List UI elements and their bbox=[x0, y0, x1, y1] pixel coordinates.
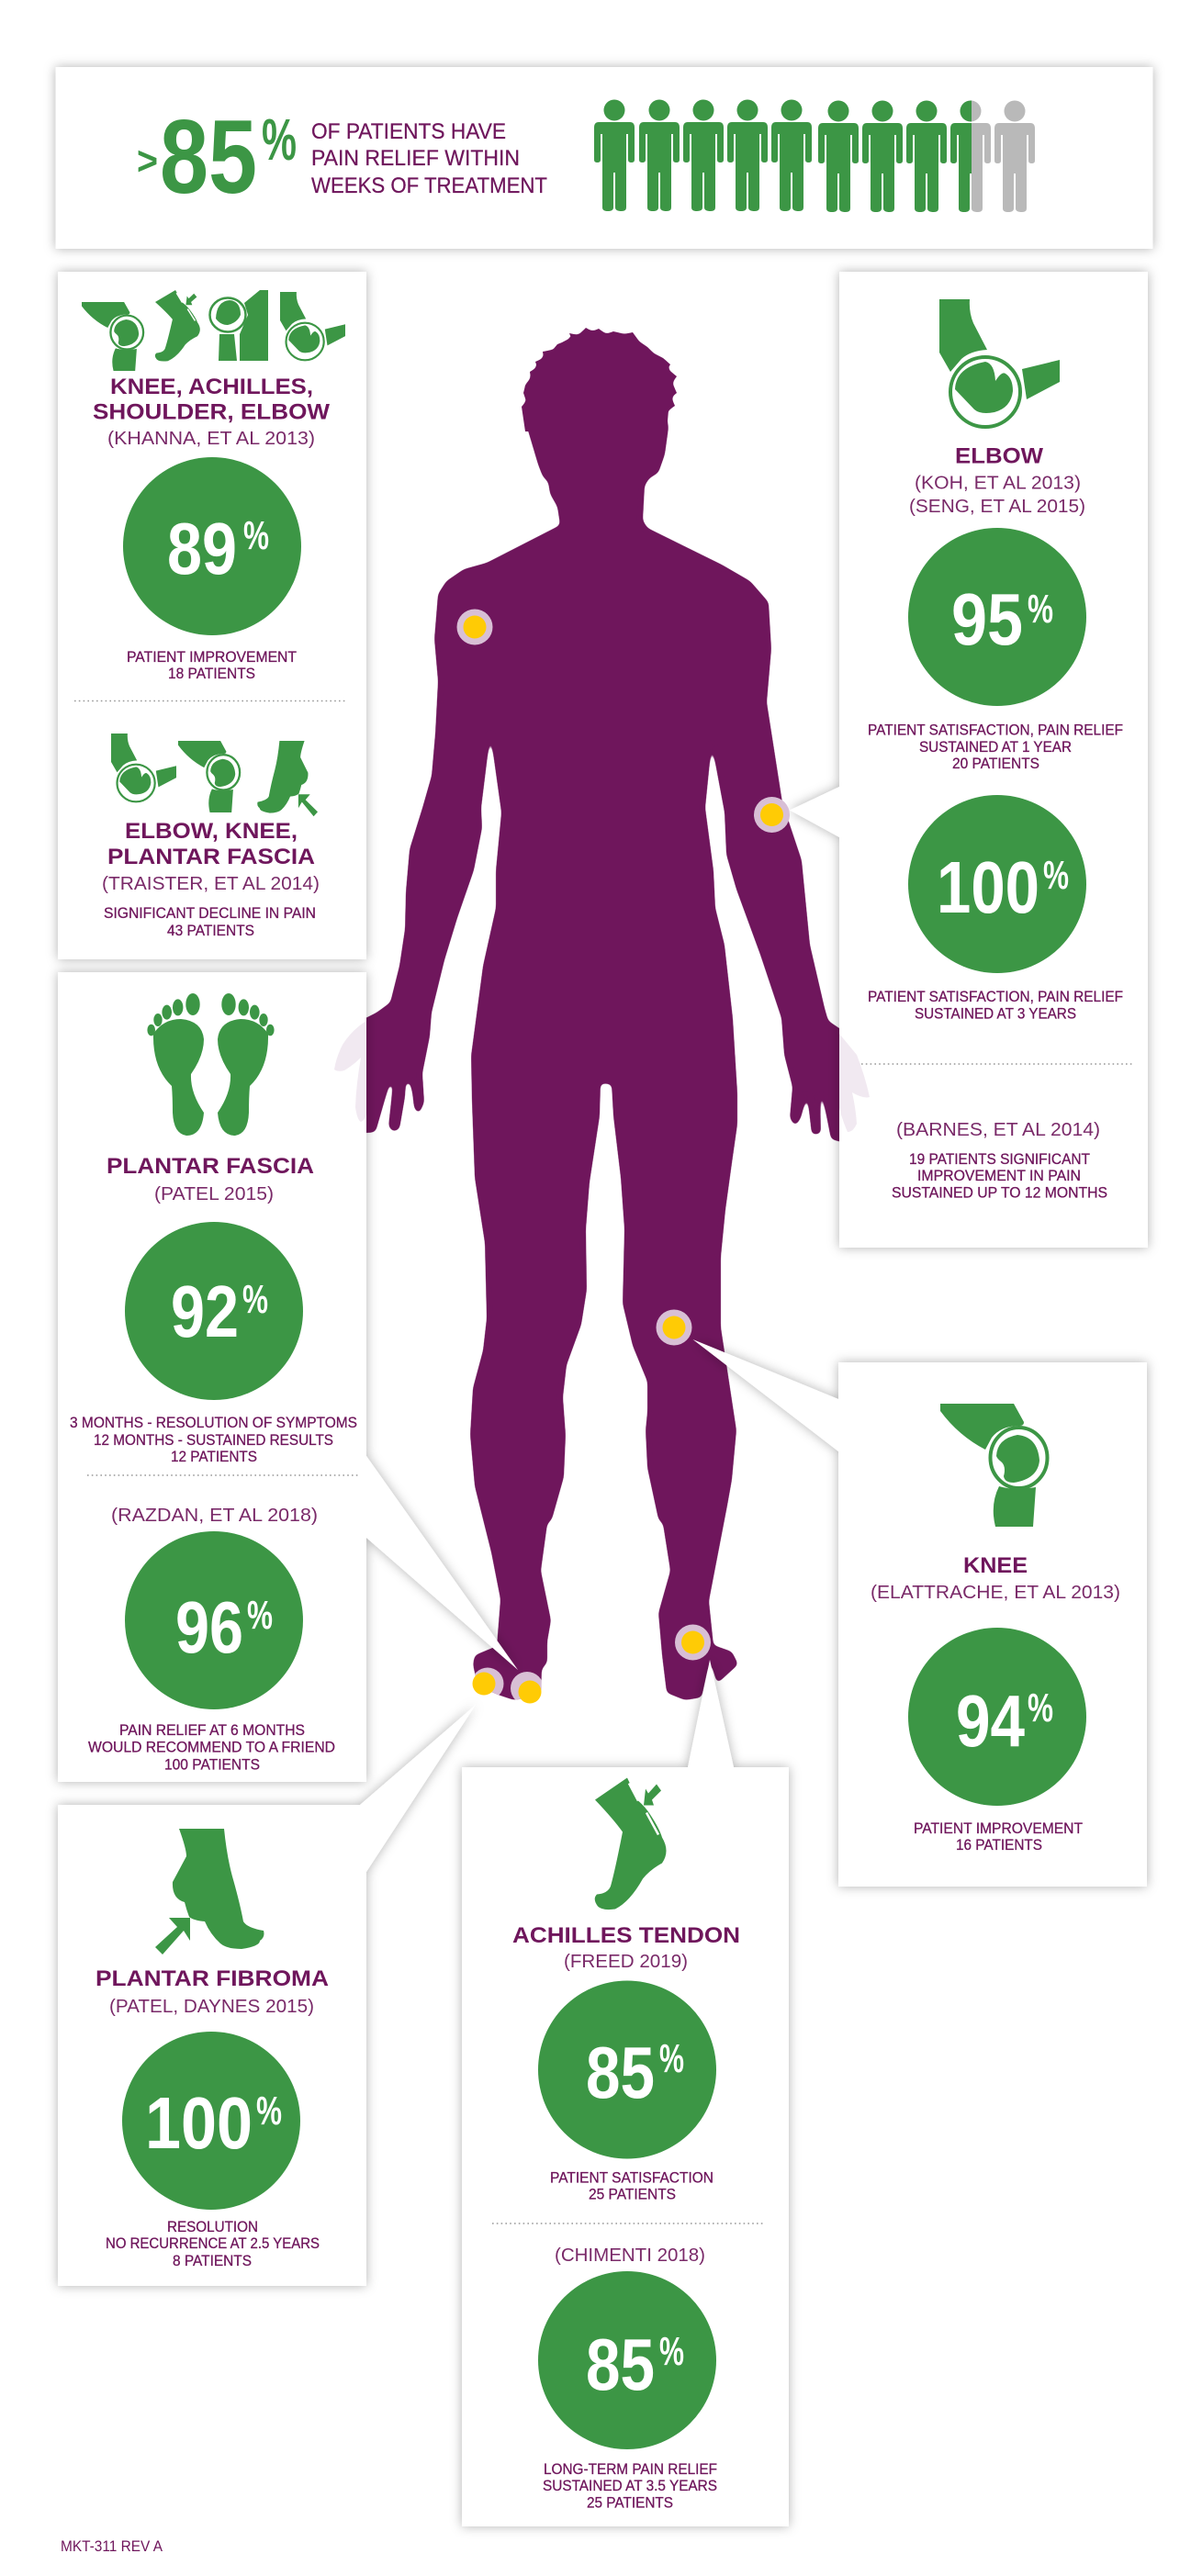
icon: achilles foot bbox=[595, 1777, 667, 1910]
stat circle 100 percent bbox=[908, 795, 1086, 973]
icon: elbow bbox=[939, 299, 1060, 427]
caption: 12 MONTHS - SUSTAINED RESULTS bbox=[94, 1432, 333, 1449]
citation: (FREED 2019) bbox=[564, 1952, 688, 1972]
caption bbox=[868, 989, 1123, 1023]
caption bbox=[868, 722, 1123, 772]
panel: achilles tendon bbox=[462, 1660, 789, 2526]
heading: KNEE, ACHILLES, bbox=[110, 375, 313, 399]
panel: overall statistic bbox=[55, 67, 1153, 249]
ghost hand: right, faded over panel bbox=[839, 1034, 870, 1132]
caption: 25 PATIENTS bbox=[589, 2187, 676, 2203]
stat circle 89 percent: 89 bbox=[167, 508, 237, 589]
stat circle 92 percent: 92 bbox=[171, 1271, 239, 1352]
citation: (RAZDAN, ET AL 2018) bbox=[111, 1506, 318, 1526]
stat circle 100 percent: % bbox=[1043, 853, 1069, 898]
caption: PATIENT SATISFACTION bbox=[550, 2170, 713, 2187]
caption: LONG-TERM PAIN RELIEF bbox=[544, 2461, 717, 2478]
citation: (CHIMENTI 2018) bbox=[555, 2246, 705, 2266]
citation: (ELATTRACHE, ET AL 2013) bbox=[871, 1583, 1120, 1603]
footer code: MKT-311 REV A bbox=[61, 2537, 163, 2555]
stat circle 85 percent: 85 bbox=[586, 2324, 655, 2405]
caption bbox=[106, 2219, 320, 2269]
heading: ELBOW, KNEE, bbox=[125, 819, 298, 844]
heading: SHOULDER, ELBOW bbox=[93, 400, 330, 424]
heading: PLANTAR FIBROMA bbox=[96, 1966, 329, 1991]
caption: WOULD RECOMMEND TO A FRIEND bbox=[88, 1739, 335, 1755]
marker: shoulder bbox=[457, 610, 492, 644]
heading bbox=[93, 375, 330, 424]
stat circle 94 percent bbox=[908, 1628, 1086, 1806]
caption: SUSTAINED AT 1 YEAR bbox=[919, 739, 1072, 756]
caption: PATIENT SATISFACTION, PAIN RELIEF bbox=[868, 722, 1123, 738]
citations: (SENG, ET AL 2015) bbox=[909, 497, 1085, 517]
caption: RESOLUTION bbox=[167, 2219, 258, 2235]
caption: SUSTAINED AT 3.5 YEARS bbox=[543, 2478, 717, 2494]
body silhouette bbox=[360, 328, 845, 1700]
statistic: greater than 85 percent: 85 bbox=[160, 99, 257, 216]
stat circle 96 percent bbox=[125, 1531, 303, 1709]
heading: ELBOW bbox=[955, 444, 1043, 468]
caption: SUSTAINED UP TO 12 MONTHS bbox=[892, 1184, 1107, 1201]
stat circle 92 percent bbox=[125, 1222, 303, 1400]
statistic: greater than 85 percent: > bbox=[137, 139, 158, 184]
caption: 43 PATIENTS bbox=[167, 923, 254, 939]
panel: knee, achilles, shoulder, elbow bbox=[58, 272, 366, 959]
text: patients have pain relief bbox=[311, 119, 547, 198]
text: patients have pain relief: OF PATIENTS HAVE bbox=[311, 119, 506, 144]
heading: KNEE bbox=[963, 1553, 1028, 1578]
caption: PATIENT IMPROVEMENT bbox=[914, 1820, 1083, 1837]
caption: 12 PATIENTS bbox=[171, 1449, 257, 1465]
icons: knee, achilles, shoulder, elbow bbox=[82, 290, 345, 371]
stat circle 100 percent: 100 bbox=[937, 846, 1039, 928]
heading: ACHILLES TENDON bbox=[512, 1923, 740, 1948]
stat circle 95 percent bbox=[908, 528, 1086, 706]
caption: 20 PATIENTS bbox=[952, 756, 1039, 772]
caption bbox=[88, 1722, 335, 1774]
stat circle 95 percent: % bbox=[1028, 587, 1053, 632]
stat circle 96 percent: % bbox=[247, 1593, 273, 1638]
caption: 16 PATIENTS bbox=[956, 1837, 1042, 1854]
citations: (KOH, ET AL 2013) bbox=[915, 474, 1081, 494]
stat circle 94 percent: 94 bbox=[956, 1680, 1025, 1762]
marker: plantar fascia bbox=[511, 1672, 542, 1704]
panel: plantar fascia bbox=[58, 972, 518, 1782]
caption: NO RECURRENCE AT 2.5 YEARS bbox=[106, 2235, 320, 2252]
stat circle 85 percent: % bbox=[659, 2036, 684, 2081]
caption bbox=[550, 2170, 713, 2203]
stat circle 94 percent: % bbox=[1028, 1686, 1053, 1730]
stat circle 100 percent: 100 bbox=[145, 2082, 253, 2164]
caption: 100 PATIENTS bbox=[164, 1757, 260, 1774]
citation: (BARNES, ET AL 2014) bbox=[896, 1120, 1100, 1140]
stat circle 85 percent bbox=[538, 1981, 716, 2159]
marker: plantar fibroma bbox=[472, 1667, 503, 1695]
caption bbox=[543, 2461, 717, 2512]
statistic: greater than 85 percent: % bbox=[262, 106, 297, 173]
caption: 3 MONTHS - RESOLUTION OF SYMPTOMS bbox=[70, 1415, 357, 1431]
caption: SUSTAINED AT 3 YEARS bbox=[915, 1006, 1076, 1023]
stat circle 85 percent: % bbox=[659, 2329, 684, 2374]
panel: plantar fibroma bbox=[58, 1705, 476, 2286]
stat circle 85 percent bbox=[538, 2271, 716, 2449]
caption bbox=[127, 649, 297, 682]
ghost hand: left, faded over panel bbox=[334, 1021, 366, 1122]
panel: elbow bbox=[790, 272, 1148, 1248]
caption bbox=[914, 1820, 1083, 1854]
stat circle 95 percent: 95 bbox=[951, 578, 1023, 660]
marker: achilles bbox=[675, 1625, 711, 1660]
stat circle 96 percent: 96 bbox=[175, 1586, 243, 1668]
citation: (PATEL, DAYNES 2015) bbox=[109, 1997, 314, 2017]
caption: IMPROVEMENT IN PAIN bbox=[917, 1168, 1081, 1184]
stat circle 85 percent: 85 bbox=[586, 2032, 655, 2113]
icon: feet bbox=[147, 993, 275, 1136]
citation: (KHANNA, ET AL 2013) bbox=[107, 429, 315, 449]
stat circle 92 percent: % bbox=[242, 1277, 268, 1322]
marker: knee bbox=[656, 1309, 692, 1346]
caption: SIGNIFICANT DECLINE IN PAIN bbox=[104, 905, 316, 922]
text: patients have pain relief: WEEKS OF TREATMENT bbox=[311, 174, 547, 198]
stat circle 100 percent: % bbox=[256, 2089, 282, 2134]
icon: plantar foot with arrow bbox=[155, 1829, 264, 1954]
caption bbox=[892, 1151, 1107, 1201]
icon: row of ten people, 85 percent green bbox=[594, 99, 1035, 212]
stat circle 100 percent bbox=[122, 2032, 300, 2210]
caption: 25 PATIENTS bbox=[587, 2495, 673, 2512]
icons: elbow, knee, plantar fascia bbox=[111, 734, 318, 816]
caption bbox=[104, 905, 316, 939]
caption bbox=[70, 1415, 357, 1465]
text: patients have pain relief: PAIN RELIEF WITHIN bbox=[311, 146, 520, 171]
caption: PATIENT SATISFACTION, PAIN RELIEF bbox=[868, 989, 1123, 1005]
heading: PLANTAR FASCIA bbox=[107, 845, 315, 869]
caption: 18 PATIENTS bbox=[168, 666, 255, 682]
panel: knee bbox=[692, 1339, 1147, 1887]
caption: 19 PATIENTS SIGNIFICANT bbox=[909, 1151, 1090, 1168]
marker: elbow bbox=[754, 797, 790, 833]
citations bbox=[909, 474, 1085, 517]
heading bbox=[107, 819, 315, 869]
citation: (PATEL 2015) bbox=[154, 1184, 274, 1204]
stat circle 89 percent: % bbox=[243, 513, 269, 558]
stat circle 89 percent bbox=[123, 457, 301, 635]
heading: PLANTAR FASCIA bbox=[107, 1154, 314, 1179]
caption: 8 PATIENTS bbox=[173, 2253, 252, 2269]
citation: (TRAISTER, ET AL 2014) bbox=[102, 874, 320, 894]
caption: PATIENT IMPROVEMENT bbox=[127, 649, 297, 666]
caption: PAIN RELIEF AT 6 MONTHS bbox=[119, 1722, 305, 1739]
icon: knee bbox=[940, 1404, 1047, 1527]
